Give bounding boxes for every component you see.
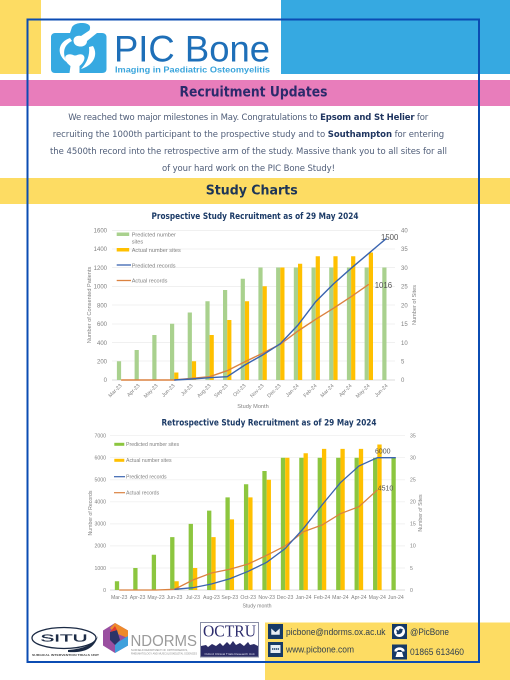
- month ticks: Aug-23: [196, 383, 212, 399]
- chart: prospective study recruitment: [87, 212, 418, 410]
- legend: sites: [132, 240, 143, 246]
- logo: NDORMS: NDORMS: [130, 633, 197, 650]
- month ticks: Jul-23: [186, 595, 200, 601]
- left axis ticks: 6000: [94, 456, 106, 462]
- left axis ticks: [94, 228, 108, 384]
- legend: [117, 232, 181, 284]
- left axis ticks: [94, 434, 106, 594]
- contact: twitter: [392, 624, 449, 639]
- month ticks: Apr-23: [126, 383, 141, 398]
- chart title: Prospective Study Recruitment as of 29 May 2024: [152, 212, 358, 222]
- month ticks: Mar-23: [111, 595, 128, 601]
- background: yellow block bottom right: [265, 622, 510, 680]
- legend: Predicted number sites: [126, 442, 179, 448]
- month ticks: Feb-24: [303, 383, 318, 399]
- right axis ticks: [410, 434, 416, 594]
- left axis ticks: 0: [104, 378, 108, 384]
- month ticks: Aug-23: [203, 595, 220, 601]
- month ticks: Oct-23: [240, 595, 256, 601]
- right axis ticks: 20: [401, 304, 408, 310]
- right axis ticks: 40: [401, 228, 408, 234]
- text block: milestones message: We reached two major milestones in May. Congratulations to Epsom and St Helier for: [68, 113, 429, 123]
- right axis ticks: 35: [410, 434, 416, 440]
- month ticks: Jan-24: [285, 383, 300, 399]
- left axis ticks: 1400: [94, 247, 108, 253]
- contact: website: www.picbone.com: [285, 644, 354, 654]
- logo: OCTRU: Oxford Clinical Trials Research Unit: [204, 652, 255, 656]
- month ticks: Jun-24: [374, 383, 389, 399]
- month ticks: May-23: [143, 383, 159, 400]
- icon: camera with bones: [51, 23, 106, 73]
- legend: Actual number sites: [126, 458, 172, 464]
- month ticks: Nov-23: [249, 383, 265, 399]
- legend: [114, 442, 179, 496]
- text block: milestones message: of your hard work on the PIC Bone Study!: [162, 164, 335, 174]
- left axis ticks: 600: [97, 322, 108, 328]
- data label: 1016: 1016: [375, 281, 392, 290]
- month ticks: Apr-24: [338, 383, 353, 398]
- month ticks: Dec-23: [266, 383, 282, 399]
- month ticks: Sep-23: [213, 383, 229, 399]
- data label: 1500: 1500: [381, 233, 399, 242]
- band: recruitment updates heading: Recruitment Updates: [180, 84, 328, 100]
- left axis ticks: 5000: [94, 478, 106, 484]
- month ticks: Jan-24: [296, 595, 312, 601]
- month ticks: Dec-23: [277, 595, 294, 601]
- contact: email: [268, 624, 386, 639]
- contact: twitter: @PicBone: [410, 627, 449, 637]
- left axis ticks: 1600: [94, 228, 108, 234]
- left axis title: Number of Records: [88, 490, 94, 535]
- background: yellow block top left: [0, 0, 41, 74]
- month ticks: Sep-23: [221, 595, 238, 601]
- month ticks: [108, 383, 389, 400]
- contact: website: [268, 642, 354, 657]
- month ticks: May-24: [369, 595, 386, 601]
- month ticks: Jun-23: [167, 595, 183, 601]
- right axis ticks: 35: [401, 247, 408, 253]
- bars: actual number sites: [177, 444, 380, 590]
- right axis ticks: 15: [410, 522, 416, 528]
- logo: SITU: SURGICAL INTERVENTION TRIALS UNIT: [32, 653, 99, 657]
- month ticks: Jun-23: [161, 383, 176, 399]
- text block: milestones message: recruiting the 1000th participant to the prospective study and to Southampton for entering: [53, 130, 444, 140]
- month ticks: Apr-24: [351, 595, 367, 601]
- chart: retrospective study recruitment: [88, 419, 424, 610]
- left axis ticks: 1200: [94, 266, 108, 272]
- month ticks: Oct-23: [232, 383, 247, 398]
- chart title: Retrospective Study Recruitment as of 29 May 2024: [162, 419, 376, 429]
- legend: Predicted records: [126, 474, 167, 480]
- right axis ticks: 25: [410, 478, 416, 484]
- line: predicted records: [174, 238, 386, 380]
- legend: Predicted records: [132, 263, 176, 269]
- month ticks: Jul-23: [180, 383, 194, 397]
- right axis ticks: [401, 228, 408, 384]
- legend: Predicted number: [132, 232, 176, 238]
- bars: predicted number sites: [119, 268, 384, 380]
- left axis ticks: 1000: [94, 566, 106, 572]
- logo: SITU: SITU: [40, 632, 88, 644]
- right axis ticks: 10: [401, 341, 408, 347]
- left axis title: Number of Consented Patients: [87, 267, 93, 343]
- right axis ticks: 20: [410, 500, 416, 506]
- band: study charts heading: [0, 178, 510, 204]
- logo: PIC Bone: [51, 23, 270, 74]
- band: recruitment updates heading: [0, 80, 510, 106]
- left axis ticks: 800: [97, 304, 108, 310]
- logo: OCTRU: OCTRU: [203, 622, 256, 640]
- icon: hexagon: [103, 623, 128, 653]
- month ticks: Apr-23: [130, 595, 145, 601]
- logo: OCTRU: [200, 622, 258, 657]
- legend: Actual records: [126, 490, 160, 496]
- bars: predicted number sites: [117, 458, 394, 590]
- left axis ticks: 2000: [94, 544, 106, 550]
- left axis ticks: 4000: [94, 500, 106, 506]
- x axis title: Study month: [242, 604, 272, 610]
- line: actual records: [121, 284, 369, 380]
- contact: email: picbone@ndorms.ox.ac.uk: [286, 627, 386, 637]
- right axis ticks: 15: [401, 322, 408, 328]
- x axis title: Study Month: [237, 404, 269, 410]
- month ticks: [111, 595, 404, 601]
- month ticks: Feb-24: [314, 595, 330, 601]
- month ticks: Nov-23: [258, 595, 275, 601]
- left axis ticks: 7000: [94, 434, 106, 440]
- data label: 6000: 6000: [375, 449, 391, 456]
- legend: Actual number sites: [132, 248, 181, 254]
- month ticks: Mar-23: [108, 383, 123, 399]
- month ticks: Jun-24: [388, 595, 404, 601]
- logo: NDORMS: RHEUMATOLOGY AND MUSCULOSKELETAL SCIENCES: [131, 652, 197, 656]
- text block: milestones message: [50, 113, 447, 174]
- legend: Actual records: [132, 278, 168, 284]
- logo: NDORMS: NUFFIELD DEPARTMENT OF ORTHOPAEDICS,: [131, 649, 188, 652]
- month ticks: May-23: [147, 595, 165, 601]
- left axis ticks: 1000: [94, 284, 108, 290]
- line: predicted records: [174, 458, 396, 589]
- right axis title: Number of Sites: [412, 285, 418, 325]
- month ticks: May-24: [355, 383, 371, 400]
- right axis ticks: 5: [401, 360, 405, 366]
- logo: SITU: [32, 628, 99, 657]
- data label: 4510: 4510: [378, 486, 393, 492]
- contact: phone: [392, 644, 464, 660]
- background: blue block top right: [281, 0, 510, 74]
- left axis ticks: 3000: [94, 522, 106, 528]
- line: actual records: [119, 490, 377, 590]
- band: study charts heading: Study Charts: [206, 182, 298, 198]
- left axis ticks: 400: [97, 341, 108, 347]
- text block: milestones message: the 4500th record into the retrospective arm of the study. Massive thank you to all sites for all: [50, 147, 447, 157]
- right axis ticks: 25: [401, 284, 408, 290]
- right axis ticks: 30: [410, 456, 416, 462]
- logo: NDORMS: [103, 623, 197, 656]
- right axis ticks: 0: [410, 588, 413, 594]
- month ticks: Mar-24: [320, 383, 335, 399]
- logo wordmark: PIC Bone: [114, 28, 270, 70]
- month ticks: Mar-24: [332, 595, 349, 601]
- logo tagline: Imaging in Paediatric Osteomyelitis: [115, 64, 270, 74]
- right axis ticks: 10: [410, 544, 416, 550]
- bars: actual number sites: [176, 252, 371, 380]
- right axis ticks: 5: [410, 566, 413, 572]
- right axis ticks: 0: [401, 378, 405, 384]
- left axis ticks: 200: [97, 360, 108, 366]
- left axis ticks: 0: [103, 588, 106, 594]
- contact: phone: 01865 613460: [410, 647, 464, 657]
- right axis ticks: 30: [401, 266, 408, 272]
- right axis title: Number of Sites: [418, 494, 424, 532]
